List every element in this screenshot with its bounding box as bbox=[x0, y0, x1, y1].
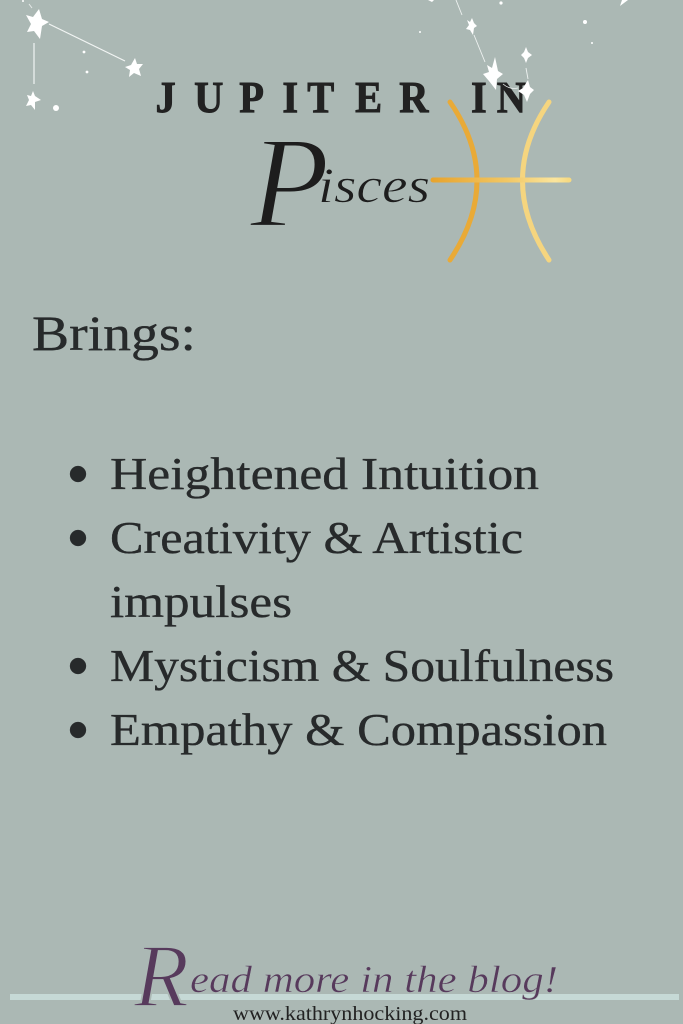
list: benefits bbox=[70, 448, 614, 755]
call to action: Read more in the blog bbox=[133, 927, 558, 1024]
heading: Brings: Brings: bbox=[32, 305, 196, 361]
list item: Empathy and Compassion: Empathy & Compassion bbox=[110, 704, 607, 755]
list item: Creativity and Artistic impulses: Creativity & Artistic bbox=[110, 512, 523, 563]
call to action: Read more in the blog: ead more in the blog! bbox=[190, 959, 558, 1001]
icon: constellation top right bbox=[419, 0, 628, 102]
title: Pisces script bbox=[249, 111, 430, 255]
footer divider bar bbox=[10, 994, 679, 1000]
list item: Heightened Intuition: Heightened Intuition bbox=[110, 448, 539, 499]
list item: Mysticism and Soulfulness: Mysticism & Soulfulness bbox=[110, 640, 614, 691]
title: Pisces script: isces bbox=[318, 157, 430, 213]
call to action: Read more in the blog: R bbox=[133, 927, 189, 1024]
icon: constellation top left bbox=[22, 0, 143, 111]
list item: Creativity and Artistic impulses bbox=[70, 512, 523, 627]
title: Jupiter in: JUPITER IN bbox=[155, 73, 526, 122]
list item: Creativity and Artistic impulses: impulses bbox=[110, 576, 292, 627]
title: Pisces script: P bbox=[249, 111, 329, 255]
icon: Pisces zodiac glyph bbox=[433, 102, 569, 260]
